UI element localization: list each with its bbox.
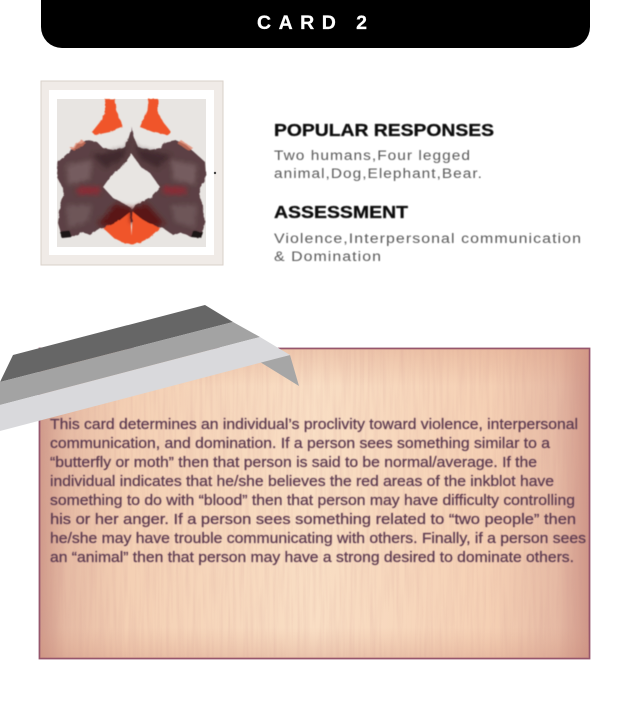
title: CARD 2	[257, 12, 367, 34]
heading: assessment: ASSESSMENT	[274, 202, 408, 222]
inkblot card image	[41, 81, 223, 265]
description text: “butterfly or moth” then that person is said to be normal/average. If the	[50, 454, 537, 471]
text block: assessment	[274, 202, 582, 264]
heading: popular responses: POPULAR RESPONSES	[274, 120, 494, 140]
text block: popular responses	[274, 120, 494, 181]
popular responses list: Two humans,Four legged	[274, 148, 471, 163]
assessment list: & Domination	[274, 249, 382, 264]
popular responses list: animal,Dog,Elephant,Bear.	[274, 166, 483, 181]
folded ribbon	[0, 305, 299, 431]
description text: his or her anger. If a person sees something related to “two people” then	[50, 511, 576, 528]
panel: card description	[40, 348, 590, 658]
description text: an “animal” then that person may have a strong desired to dominate others.	[50, 549, 574, 566]
header bar: card 2	[41, 0, 590, 48]
description text: he/she may have trouble communicating with others. Finally, if a person sees	[50, 530, 586, 547]
description text: communication, and domination. If a person sees something similar to a	[50, 435, 551, 452]
description text: This card determines an individual’s proclivity toward violence, interpersonal	[50, 416, 578, 433]
assessment list: Violence,Interpersonal communication	[274, 231, 582, 246]
description text: something to do with “blood” then that person may have difficulty controlling	[50, 492, 575, 509]
description text: individual indicates that he/she believes the red areas of the inkblot have	[50, 473, 554, 490]
